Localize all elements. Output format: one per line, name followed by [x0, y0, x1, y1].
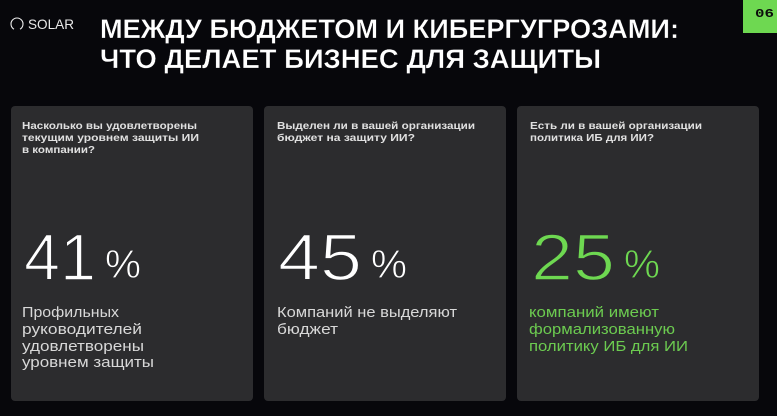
number 25%: % [624, 243, 660, 287]
number 25% [531, 220, 660, 294]
description 1: удовлетворены [22, 338, 144, 355]
question 3 [530, 120, 702, 144]
number 45%: % [371, 243, 407, 287]
description 1: руководителей [22, 321, 142, 338]
description 2: Компаний не выделяют [277, 304, 457, 321]
question 2: бюджет на защиту ИИ? [277, 132, 415, 144]
logo: Solar: SOLAR [28, 16, 74, 32]
panel: policy 25% [517, 106, 759, 401]
question 1: в компании? [22, 144, 95, 156]
number 41%: % [105, 243, 141, 287]
question 1: Насколько вы удовлетворены [22, 120, 197, 132]
number 41% [24, 220, 141, 294]
panel: satisfaction 41% [11, 106, 253, 401]
description 1 [22, 304, 154, 371]
description 3 [529, 304, 688, 355]
description 3: политику ИБ для ИИ [529, 338, 688, 355]
panel: budget 45% [264, 106, 506, 401]
question 1 [22, 120, 199, 156]
description 2: бюджет [277, 321, 338, 338]
question 2 [277, 120, 475, 144]
question 3: Есть ли в вашей организации [530, 120, 702, 132]
title [100, 14, 679, 74]
description 2 [277, 304, 457, 338]
question 3: политика ИБ для ИИ? [530, 132, 654, 144]
description 3: формализованную [529, 321, 675, 338]
title: ЧТО ДЕЛАЕТ БИЗНЕС ДЛЯ ЗАЩИТЫ [100, 44, 601, 74]
number 45% [278, 220, 407, 294]
page number badge [743, 0, 777, 33]
description 1: уровнем защиты [22, 354, 154, 371]
description 3: компаний имеют [529, 304, 659, 321]
number 25%: 25 [531, 220, 615, 294]
question 2: Выделен ли в вашей организации [277, 120, 475, 132]
number 45%: 45 [278, 220, 362, 294]
question 1: текущим уровнем защиты ИИ [22, 132, 199, 144]
title: МЕЖДУ БЮДЖЕТОМ И КИБЕРГУГРОЗАМИ: [100, 14, 679, 44]
number 41%: 41 [24, 220, 96, 294]
page number badge: 06 [755, 7, 774, 21]
description 1: Профильных [22, 304, 120, 321]
